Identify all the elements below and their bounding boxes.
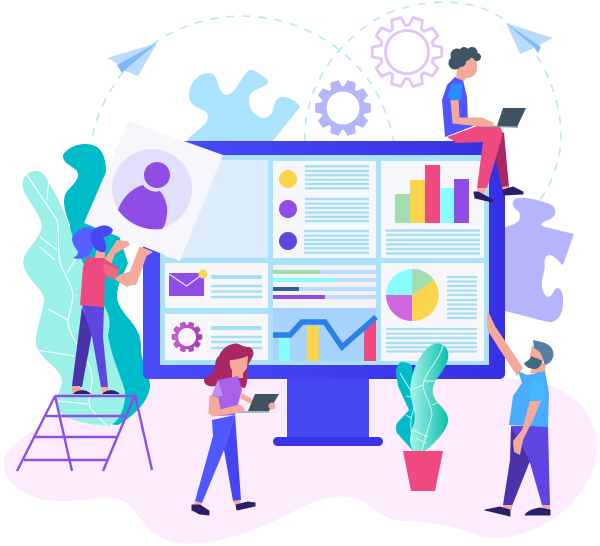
puzzle piece blue — [186, 70, 300, 142]
plant — [396, 344, 448, 451]
screen background — [160, 155, 489, 365]
plant pot — [403, 451, 443, 491]
person: man pointing — [485, 311, 553, 516]
panel: bar chart — [381, 161, 484, 258]
background blob — [4, 378, 597, 544]
panel: gear — [165, 314, 268, 360]
mint leaf left — [23, 171, 125, 426]
leaf veins — [27, 175, 107, 426]
panel: pie chart — [381, 263, 484, 361]
monitor frame — [143, 141, 505, 379]
monitor stand — [273, 379, 383, 446]
panel: line chart — [273, 308, 376, 361]
gear outline lavender — [372, 18, 442, 86]
dashed orbit right — [305, 2, 561, 235]
ladder — [17, 395, 152, 471]
panel: progress bars — [273, 265, 376, 308]
panel: envelope — [165, 263, 268, 308]
profile card — [84, 121, 223, 261]
person: woman on ladder — [72, 226, 152, 394]
gear periwinkle — [316, 81, 370, 135]
person: woman with tablet — [192, 344, 279, 515]
panel: list with dots — [273, 161, 376, 258]
paper plane right — [506, 23, 553, 54]
teal leaf left — [63, 144, 150, 425]
person: sitting with laptop — [442, 47, 526, 202]
dashed orbit left — [89, 16, 394, 200]
panel: top left — [165, 160, 268, 258]
puzzle piece periwinkle — [505, 198, 574, 322]
paper plane left — [107, 43, 157, 76]
